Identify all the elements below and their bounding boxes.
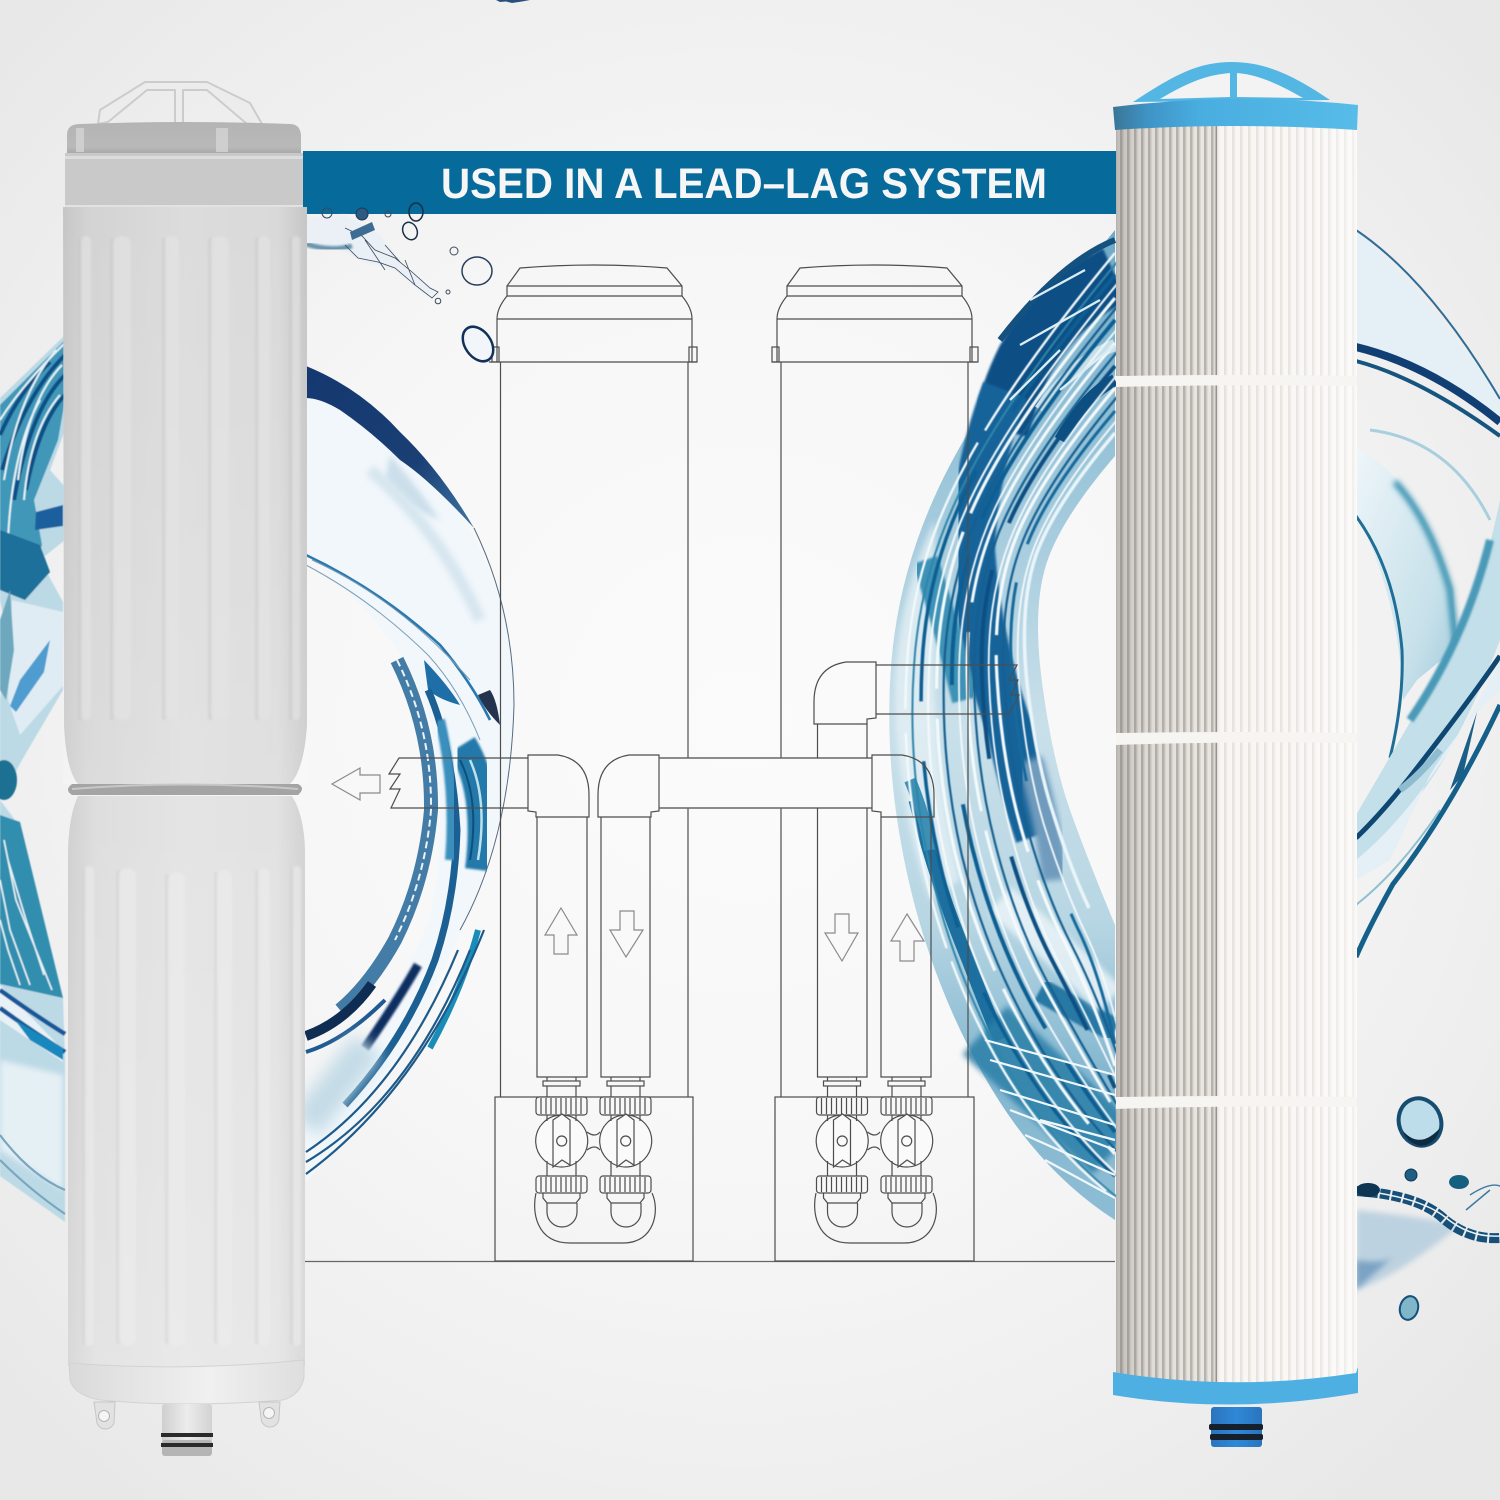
mounting tabs <box>94 1402 115 1429</box>
top cap <box>1113 99 1358 130</box>
left cartridge <box>63 82 307 1456</box>
banner <box>303 151 1116 214</box>
right housing <box>772 265 978 1261</box>
handle <box>98 82 262 124</box>
outlet pipe and connecting pipework <box>389 662 1019 1077</box>
water splash: lower right <box>1356 1183 1500 1290</box>
banner heading: USED IN A LEAD–LAG SYSTEM <box>441 160 1047 208</box>
valve assemblies <box>535 1077 936 1243</box>
technical diagram: lead-lag system <box>305 265 1115 1262</box>
water swirl: far left <box>0 335 65 1222</box>
top cap <box>67 122 301 155</box>
right cartridge <box>1113 62 1358 1447</box>
water swirl: left ring <box>306 366 514 1182</box>
band <box>68 784 302 795</box>
flow strands <box>905 253 1122 1201</box>
water bubbles: lower right <box>1392 1092 1469 1322</box>
small mark at top edge <box>496 0 530 3</box>
water splash and bubbles: upper left <box>306 203 500 367</box>
outlet nipple <box>162 1404 212 1456</box>
lower body ribs <box>82 866 301 1346</box>
bottom cap <box>1113 1367 1358 1405</box>
cap collar <box>65 153 303 207</box>
left housing <box>489 265 697 1261</box>
top handle <box>1133 62 1330 102</box>
bottom cap <box>69 1360 304 1404</box>
outlet nipple <box>1211 1407 1262 1447</box>
water swirl: far right <box>1356 230 1500 957</box>
baseline <box>305 1260 1115 1262</box>
pleated filter media <box>1116 126 1216 1382</box>
flow arrows <box>332 768 924 961</box>
water swirl: central right band <box>889 230 1122 1220</box>
retaining bands <box>1116 375 1357 1109</box>
upper body ribs <box>78 236 300 720</box>
upper body <box>63 207 307 784</box>
lower body <box>68 796 305 1366</box>
